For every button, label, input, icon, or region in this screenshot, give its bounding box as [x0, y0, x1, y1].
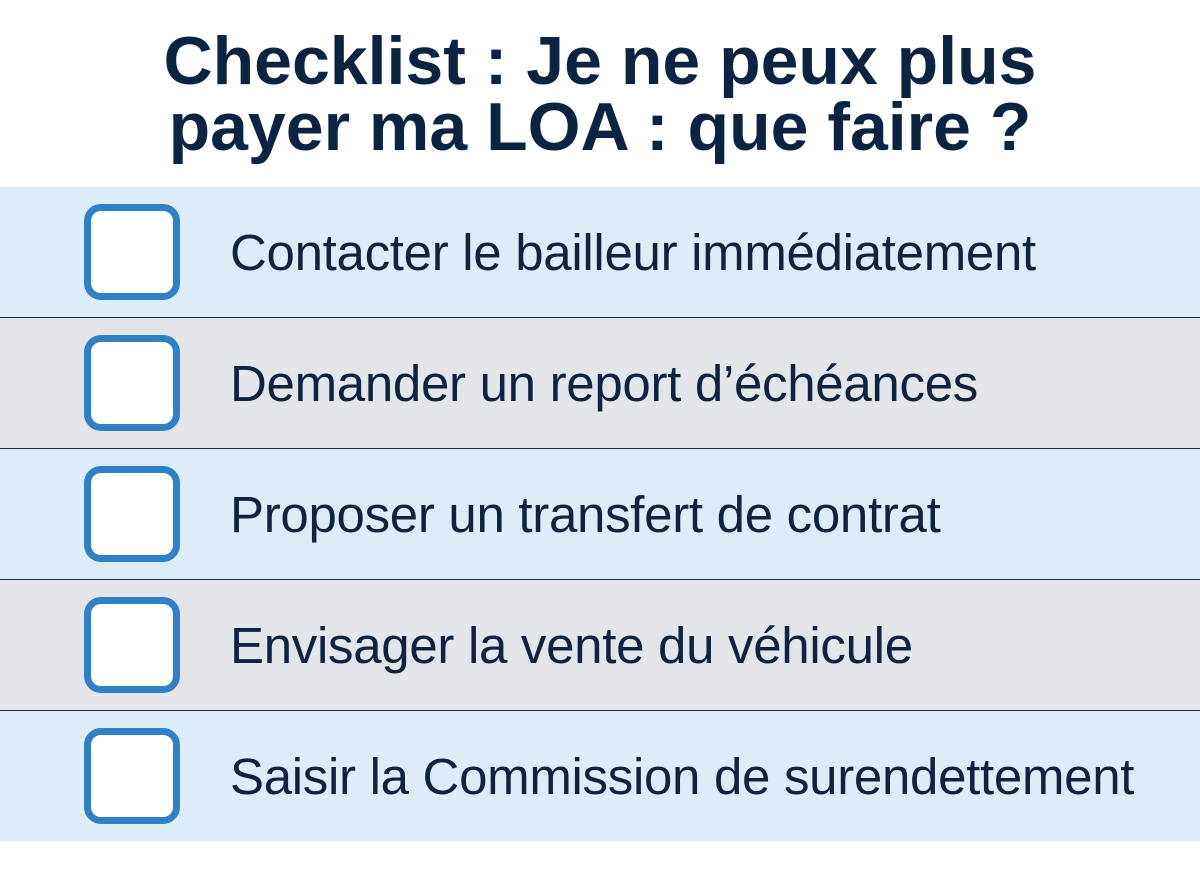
- title: [164, 23, 1036, 165]
- text 3: Proposer un transfert de contrat: [230, 486, 940, 543]
- checkbox 2: [84, 335, 180, 431]
- checkbox 3: [84, 466, 180, 562]
- item 4: [0, 580, 1200, 711]
- checkbox 5: [84, 728, 180, 824]
- item 1: [0, 187, 1200, 318]
- text 5: Saisir la Commission de surendettement: [230, 748, 1134, 805]
- checkbox 4: [84, 597, 180, 693]
- text 2: Demander un report d’échéances: [230, 355, 978, 412]
- checklist: [0, 187, 1200, 841]
- text 4: Envisager la vente du véhicule: [230, 617, 913, 674]
- text 1: Contacter le bailleur immédiatement: [230, 224, 1036, 281]
- item 5: [0, 711, 1200, 841]
- title: payer ma LOA : que faire ?: [169, 89, 1031, 165]
- checkbox 1: [84, 204, 180, 300]
- item 3: [0, 449, 1200, 580]
- title: Checklist : Je ne peux plus: [164, 23, 1036, 99]
- item 2: [0, 318, 1200, 449]
